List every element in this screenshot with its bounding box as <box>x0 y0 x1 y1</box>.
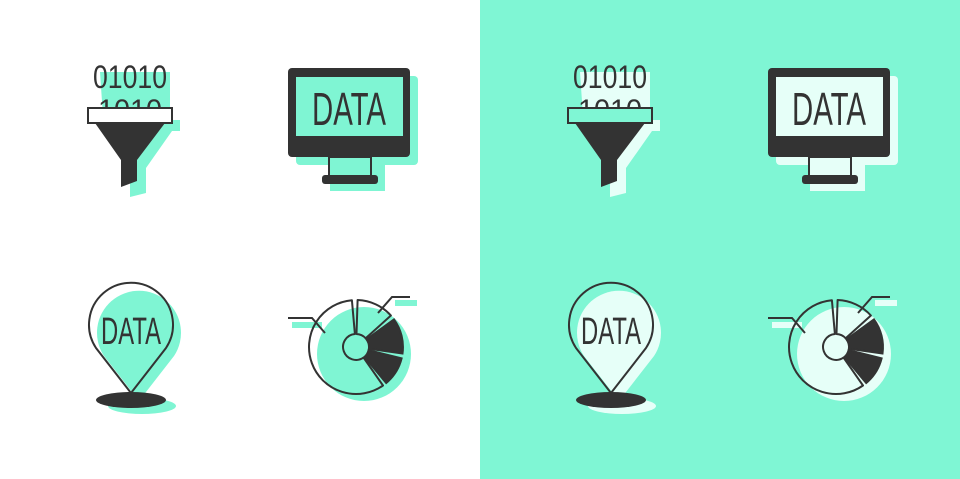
icon: location pin with DATA: DATA <box>101 311 161 353</box>
panel: teal side icons <box>568 59 898 414</box>
icon: funnel with binary <box>88 59 182 197</box>
right teal background panel <box>480 0 960 479</box>
icon: monitor with DATA <box>288 68 418 191</box>
icon: funnel with binary: 1010 <box>98 94 162 127</box>
icon: pie chart (teal) <box>768 297 897 401</box>
icon: funnel with binary (teal): 1010 <box>578 94 642 127</box>
icon: monitor with DATA (teal) <box>768 68 898 191</box>
icon: funnel with binary: 01010 <box>93 59 167 95</box>
icon: location pin with DATA <box>89 283 181 414</box>
icon: monitor with DATA: DATA <box>312 83 386 135</box>
panel: white side icons <box>88 59 418 414</box>
icon: location pin with DATA (teal) <box>569 283 661 414</box>
icon: funnel with binary (teal) <box>568 59 662 197</box>
icon: funnel with binary (teal): 01010 <box>573 59 647 95</box>
icon: pie chart <box>288 297 417 401</box>
icon: location pin with DATA (teal): DATA <box>581 311 641 353</box>
icon: monitor with DATA (teal): DATA <box>792 83 866 135</box>
